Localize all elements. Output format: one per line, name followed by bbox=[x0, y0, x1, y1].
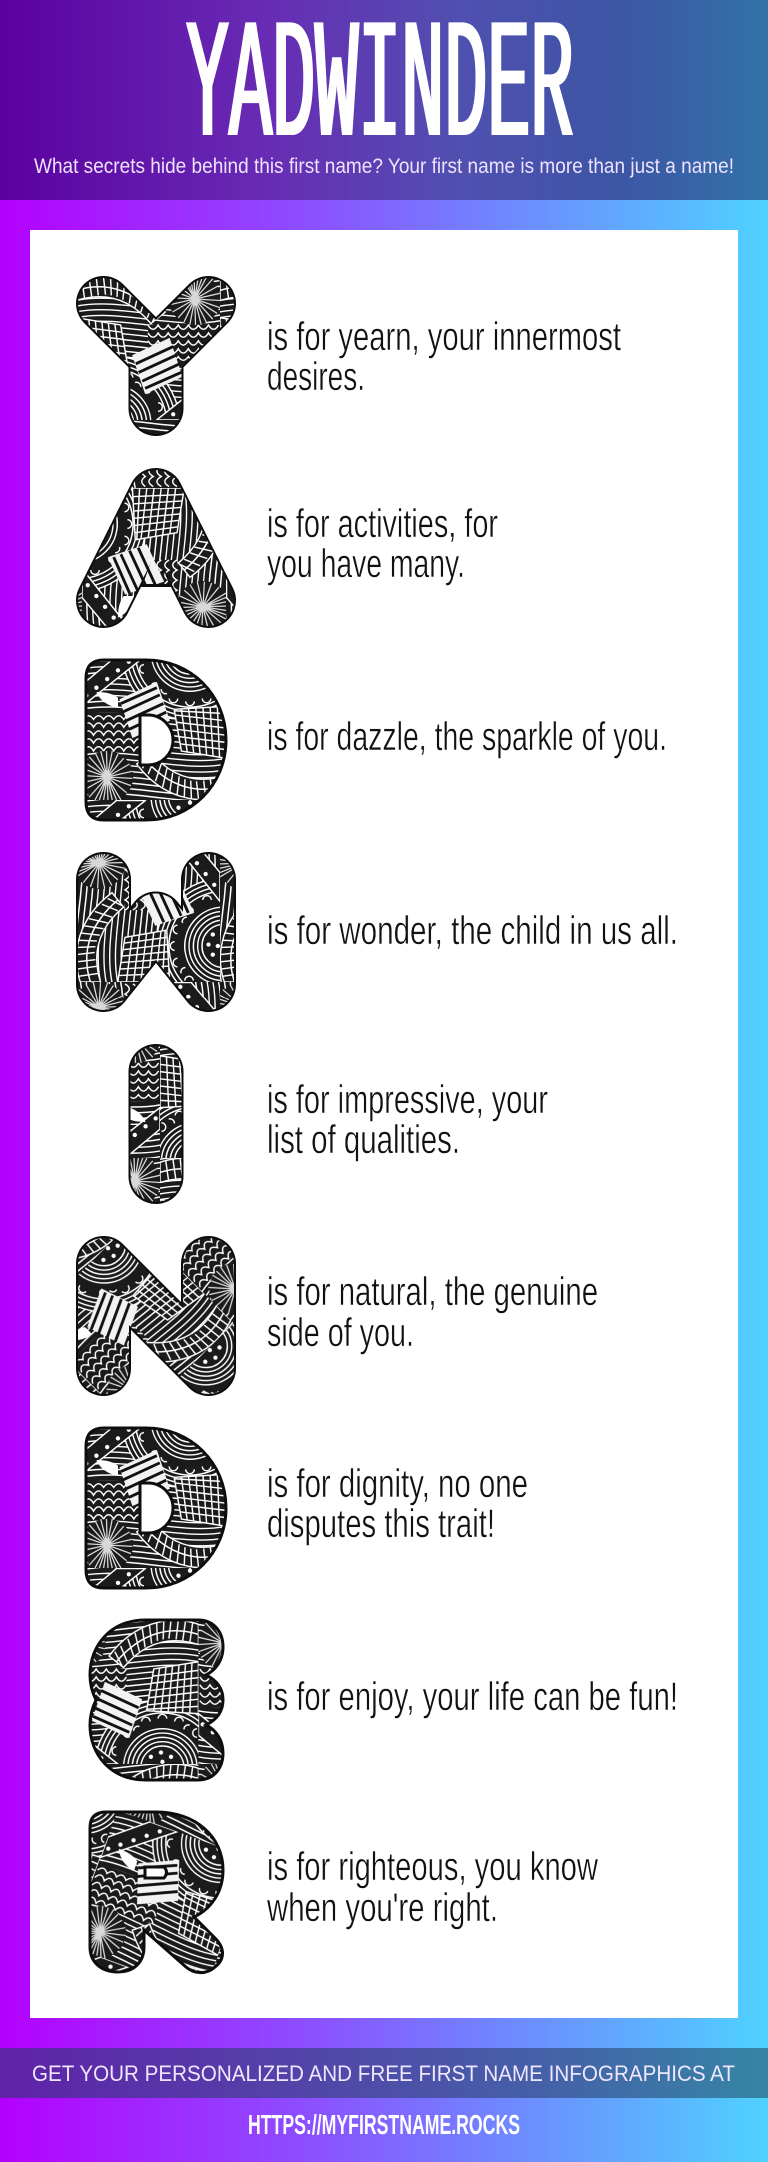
text: N line: is for natural, the genuine bbox=[267, 1270, 598, 1314]
row: A bbox=[104, 496, 498, 600]
text: Y line: is for yearn, your innermost bbox=[267, 315, 621, 359]
footer call to action: GET YOUR PERSONALIZED AND FREE FIRST NAME INFOGRAPHICS AT bbox=[32, 2061, 735, 2086]
text: R line bbox=[266, 1845, 598, 1930]
row: D second bbox=[86, 1428, 528, 1588]
row: W bbox=[104, 880, 678, 984]
icon: patterned letter N bbox=[104, 1264, 208, 1368]
icon: patterned letter D bbox=[86, 1428, 226, 1588]
text: A line: is for activities, for bbox=[267, 502, 498, 546]
text: D second line: is for dignity, no one bbox=[267, 1462, 528, 1506]
row: E bbox=[90, 1620, 678, 1780]
icon: patterned letter I bbox=[128, 1072, 184, 1176]
row: R bbox=[90, 1812, 598, 1973]
text: I line: list of qualities. bbox=[267, 1118, 460, 1162]
icon: patterned letter D bbox=[86, 660, 226, 820]
text: A line bbox=[267, 502, 498, 586]
footer band bbox=[0, 2048, 768, 2098]
icon: patterned letter A bbox=[104, 496, 208, 600]
icon: patterned letter W bbox=[104, 880, 208, 984]
row: N bbox=[104, 1264, 598, 1368]
text: N line bbox=[267, 1270, 598, 1355]
text: Y line bbox=[267, 315, 621, 399]
text: Y line: desires. bbox=[267, 355, 365, 399]
icon: patterned letter R bbox=[90, 1812, 223, 1973]
text: N line: side of you. bbox=[267, 1311, 414, 1355]
row: Y bbox=[104, 304, 621, 408]
text: R line: is for righteous, you know bbox=[267, 1845, 598, 1889]
text: D second line: disputes this trait! bbox=[267, 1502, 495, 1546]
white card bbox=[30, 230, 738, 2018]
row: D bbox=[86, 660, 667, 820]
icon: patterned letter E bbox=[90, 1620, 223, 1780]
text: D second line bbox=[267, 1462, 528, 1546]
footer band background bbox=[0, 2048, 768, 2098]
text: R line: when you're right. bbox=[266, 1886, 498, 1930]
header band bbox=[0, 0, 768, 200]
header bbox=[0, 0, 768, 200]
text: I line bbox=[267, 1078, 548, 1162]
text: A line: you have many. bbox=[267, 542, 465, 586]
row: I bbox=[156, 1072, 548, 1176]
footer url: HTTPS://MYFIRSTNAME.ROCKS bbox=[248, 2109, 520, 2140]
panel: name letters bbox=[30, 230, 738, 2018]
text: I line: is for impressive, your bbox=[267, 1078, 548, 1122]
icon: patterned letter Y bbox=[104, 304, 208, 408]
